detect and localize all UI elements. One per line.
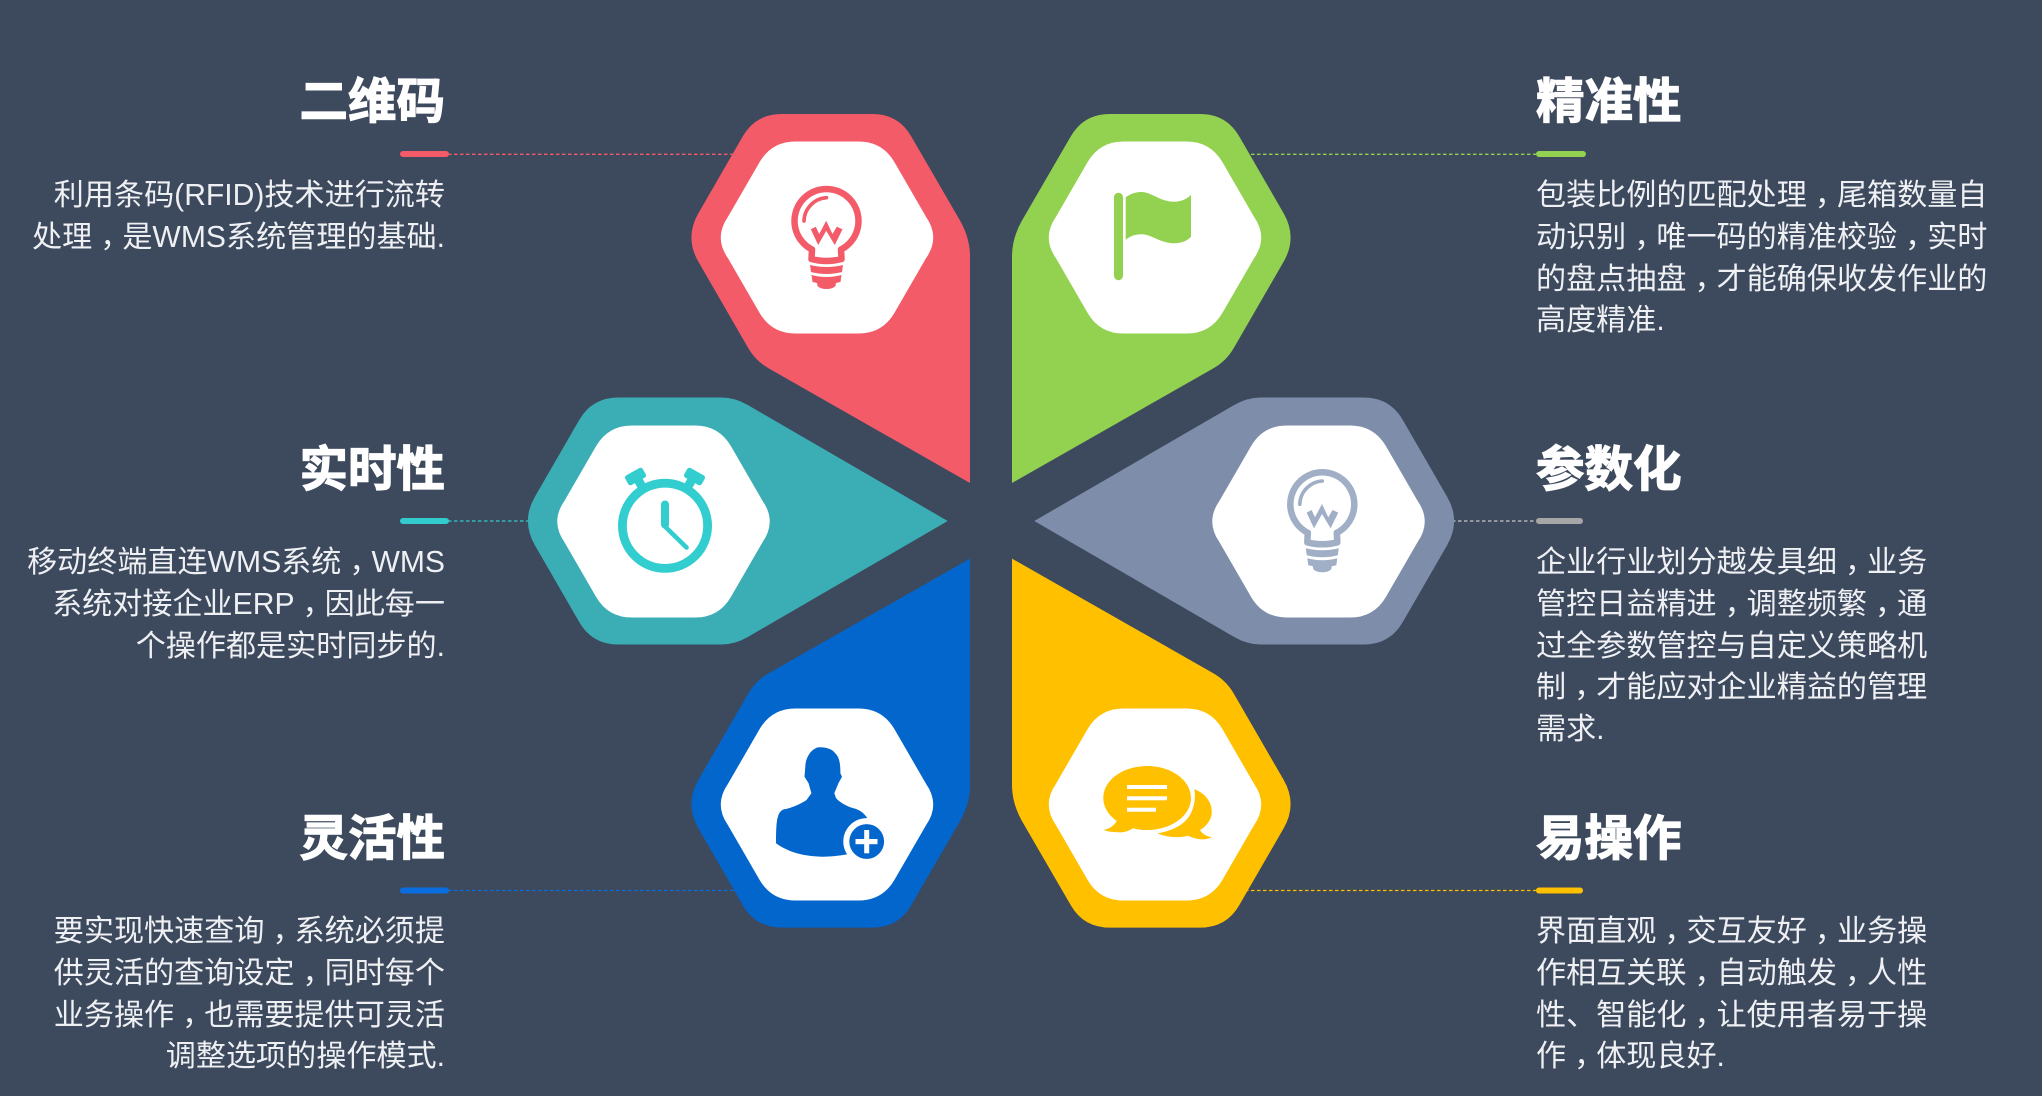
petal: blue 灵活性: [691, 559, 970, 928]
text: 精准性 description: 的盘点抽盘 ，才能确保收发作业的: [1536, 263, 1987, 296]
text: 参数化 description: [1536, 546, 1927, 746]
text: 参数化 description: 管控日益精进 ，调整频繁 ，通: [1536, 588, 1927, 621]
text: 实时性 description: 系统对接企业ERP ，因此每一: [52, 588, 445, 621]
petal: slate 参数化: [1034, 398, 1454, 644]
text: 易操作 description: [1536, 915, 1927, 1073]
accent bar: 灵活性: [400, 888, 449, 894]
heading: 参数化: 参数化: [1536, 442, 1682, 496]
icon: teal stopwatch: [622, 467, 708, 568]
text: 易操作 description: 作 ，体现良好.: [1536, 1040, 1725, 1073]
accent bar: 实时性: [400, 518, 449, 524]
text: 精准性 description: 包装比例的匹配处理 ，尾箱数量自: [1536, 179, 1987, 212]
petal: teal 实时性: [528, 398, 948, 644]
petal: red 二维码: [691, 114, 970, 483]
accent bar: 二维码: [400, 151, 449, 157]
petal: yellow 易操作: [1012, 559, 1291, 928]
icon: yellow chat bubbles: [1103, 766, 1212, 839]
heading: 灵活性: 灵活性: [299, 812, 445, 866]
text: 易操作 description: 作相互关联 ，自动触发 ，人性: [1536, 957, 1927, 990]
text: 精准性 description: [1536, 179, 1987, 337]
icon: blue person with plus badge: [776, 747, 890, 865]
text: 实时性 description: [27, 546, 445, 663]
text: 灵活性 description: 供灵活的查询设定 ，同时每个: [54, 957, 445, 990]
text: 实时性 description: 移动终端直连WMS系统 ，WMS: [27, 546, 445, 579]
text: 精准性 description: 高度精准.: [1536, 304, 1665, 337]
icon: red light bulb: [794, 189, 858, 289]
accent bar: 易操作: [1536, 888, 1583, 894]
text: 实时性 description: 个操作都是实时同步的.: [136, 630, 445, 663]
icon: grey light bulb: [1290, 472, 1354, 572]
heading: 二维码: 二维码: [299, 75, 445, 129]
accent bar: 参数化: [1536, 518, 1583, 524]
text: 灵活性 description: 要实现快速查询 ，系统必须提: [54, 915, 445, 948]
text: 二维码 description: 处理 ，是WMS系统管理的基础.: [32, 221, 445, 254]
text: 参数化 description: 企业行业划分越发具细 ，业务: [1536, 546, 1927, 579]
heading: 实时性: 实时性: [299, 442, 445, 496]
heading: 易操作: 易操作: [1536, 812, 1682, 866]
text: 易操作 description: 性、智能化 ，让使用者易于操: [1536, 999, 1927, 1032]
text: 易操作 description: 界面直观 ，交互友好 ，业务操: [1536, 915, 1927, 948]
icon: green flag: [1114, 192, 1191, 280]
text: 参数化 description: 需求.: [1536, 713, 1605, 746]
text: 二维码 description: 利用条码(RFID)技术进行流转: [54, 179, 445, 212]
heading: 精准性: 精准性: [1536, 75, 1682, 129]
text: 参数化 description: 过全参数管控与自定义策略机: [1536, 630, 1927, 663]
text: 灵活性 description: 调整选项的操作模式.: [166, 1040, 445, 1073]
petal: green 精准性: [1012, 114, 1291, 483]
text: 灵活性 description: [54, 915, 445, 1073]
text: 灵活性 description: 业务操作 ，也需要提供可灵活: [54, 999, 445, 1032]
text: 参数化 description: 制 ，才能应对企业精益的管理: [1536, 671, 1927, 704]
text: 精准性 description: 动识别 ，唯一码的精准校验 ，实时: [1536, 221, 1987, 254]
accent bar: 精准性: [1536, 151, 1586, 157]
text: 二维码 description: [32, 179, 445, 254]
